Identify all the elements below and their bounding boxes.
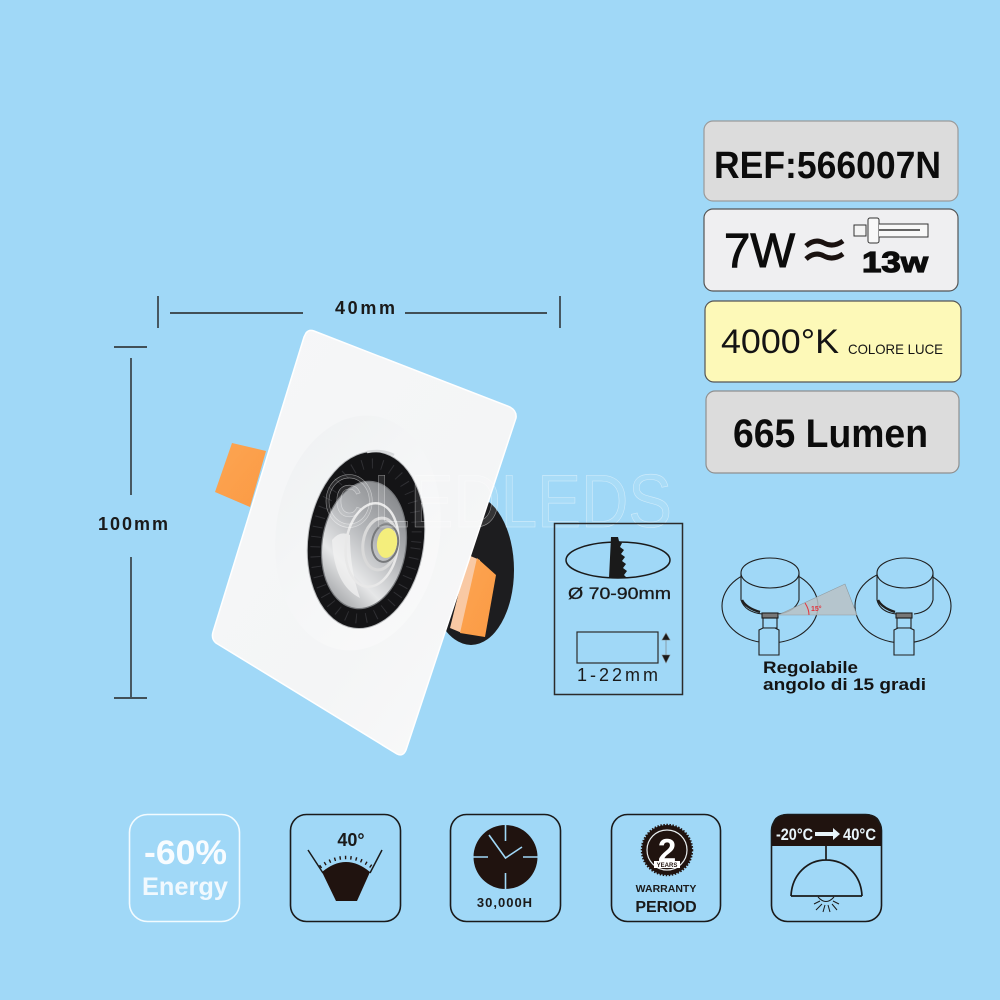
square white plate [212, 330, 516, 755]
wedge [778, 584, 857, 615]
badge: beam angle [290, 814, 400, 922]
spec panel: wattage: 7W [724, 225, 796, 278]
red angle arc [805, 603, 809, 615]
approx symbol [806, 241, 843, 259]
badge: energy saving: -60% [144, 834, 227, 872]
left lamp [722, 558, 818, 655]
spec panel: reference [704, 121, 958, 201]
badge: warranty: 2 [658, 832, 676, 869]
badge: lifetime clock [450, 814, 560, 922]
spec panel: lumen: 665 Lumen [733, 412, 928, 456]
badge: warranty: WARRANTY [636, 883, 696, 895]
rear black housing [428, 495, 514, 645]
badge: operating temperature [772, 814, 882, 922]
dimension: width 40mm [158, 296, 560, 328]
icon: saw and hole [566, 537, 670, 578]
dimension: width 40mm: 40mm [335, 298, 395, 318]
panel: cutout size: 1-22mm [577, 665, 658, 685]
reflector rings [340, 500, 404, 590]
spec panel: colour temperature [705, 301, 961, 382]
caption [763, 658, 926, 694]
icon: depth arrows [662, 633, 670, 663]
panel: cutout size [554, 524, 682, 694]
orange clip left [215, 443, 266, 507]
badge: energy saving [130, 814, 240, 922]
badge: energy saving: Energy [142, 873, 228, 901]
badge: warranty [612, 814, 720, 922]
orange clip right [450, 555, 496, 637]
spec panel: wattage: 13w [862, 247, 929, 279]
right lamp [855, 558, 951, 655]
bezel highlight [367, 451, 394, 455]
badge: beam angle: 40° [337, 830, 365, 850]
watermark: ©LEDLEDS [325, 459, 672, 543]
COB chip [375, 527, 399, 559]
caption: angolo di 15 gradi [763, 675, 926, 694]
caption: Regolabile [763, 658, 858, 677]
spec panel: colour temperature: COLORE LUCE [848, 341, 943, 357]
diagram: 15 degree tilt: 15° [811, 605, 822, 613]
badge: operating temperature: 40°C [843, 825, 876, 844]
icon: CFL tube [854, 218, 928, 243]
depth rectangle [577, 632, 658, 663]
spec panel: lumen [706, 391, 959, 473]
spec panel: colour temperature: 4000°K [721, 323, 839, 361]
panel: cutout size: Ø 70-90mm [568, 584, 671, 603]
reflector highlights [332, 533, 360, 598]
product photo: square COB downlight [212, 330, 516, 755]
badge: warranty: YEARS [657, 863, 677, 869]
dimension: height 100mm: 100mm [98, 514, 168, 534]
bezel fins [306, 457, 426, 625]
badge: warranty: PERIOD [635, 899, 697, 916]
black bezel [296, 444, 436, 636]
badge: operating temperature: -20°C [776, 825, 813, 844]
dimension: height 100mm [98, 347, 168, 698]
diagram: 15 degree tilt [722, 558, 951, 694]
spec panel: wattage [704, 209, 958, 291]
recessed ring [260, 405, 456, 661]
badge: lifetime clock: 30,000H [477, 895, 533, 910]
reflector lens [314, 476, 414, 614]
spec panel: reference: REF:566007N [714, 145, 941, 187]
